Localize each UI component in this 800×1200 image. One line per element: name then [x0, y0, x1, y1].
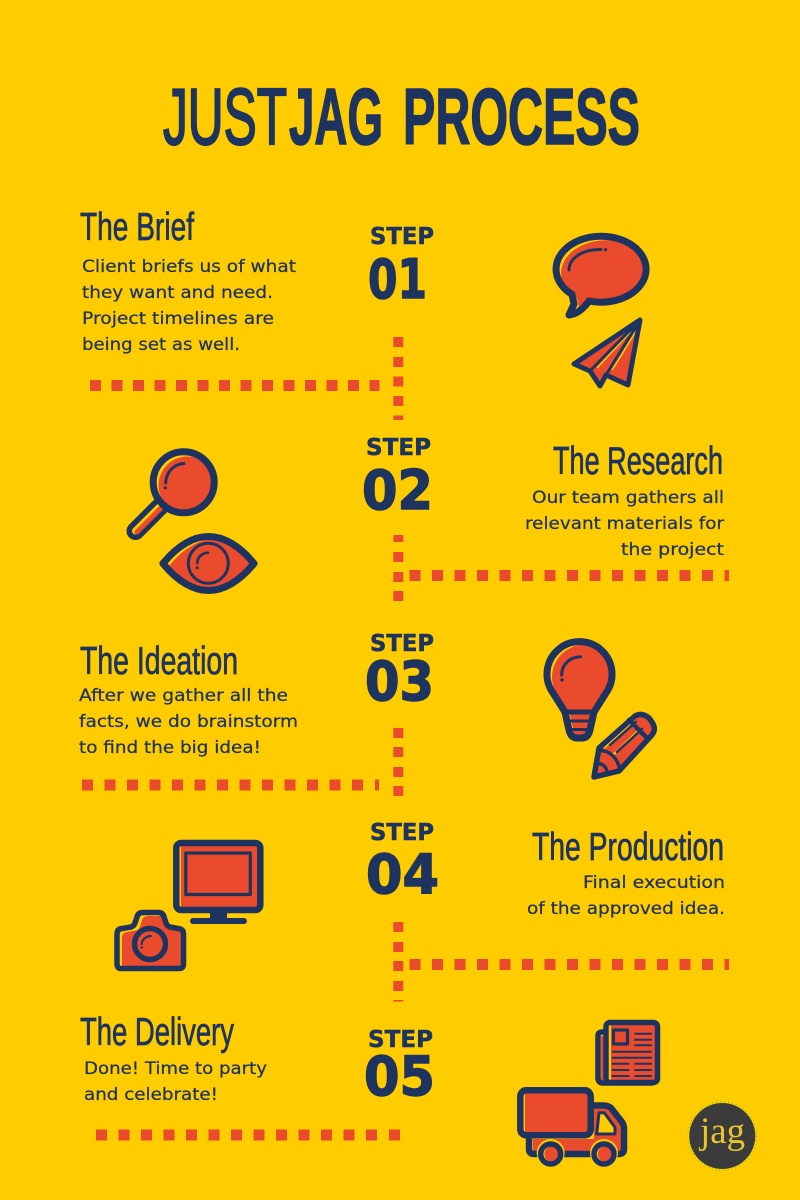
text block: the research: Our team gathers all [532, 488, 724, 508]
step badge 03: STEP [370, 629, 434, 657]
step badge 04: STEP [370, 818, 434, 846]
heading: the delivery: The Delivery [80, 1011, 235, 1054]
text block: the research: relevant materials for [525, 514, 725, 534]
icon: eye [163, 536, 260, 593]
connector dashes 4 [393, 922, 729, 1002]
step badge 01 [368, 222, 434, 311]
icon: monitor [176, 843, 260, 924]
panel: step 5 the delivery [80, 1011, 658, 1167]
text block: the production [527, 873, 725, 919]
text block: the production: of the approved idea. [527, 899, 725, 919]
icon: camera [117, 912, 188, 972]
text block: the delivery: Done! Time to party [84, 1059, 267, 1079]
logo: jag badge: jag [698, 1111, 745, 1152]
text block: the ideation: After we gather all the [79, 686, 288, 706]
title: PROCESS [403, 72, 640, 161]
text block: the brief: Client briefs us of what [82, 257, 296, 277]
connector dashes 1 [90, 337, 403, 420]
icon: delivery truck [520, 1090, 628, 1167]
icon: magnifying glass [136, 451, 216, 532]
step badge 03: 03 [365, 650, 434, 713]
step badge 04: 04 [366, 843, 439, 906]
text block: the brief: they want and need. [82, 283, 273, 303]
panel: step 3 the ideation [79, 629, 654, 796]
step badge 01: STEP [370, 222, 434, 250]
title [163, 72, 640, 161]
step badge 05: STEP [368, 1025, 433, 1053]
text block: the ideation: to find the big idea! [79, 738, 261, 758]
icon: newspaper [598, 1022, 658, 1083]
text block: the production: Final execution [583, 873, 725, 893]
step badge 02: STEP [366, 433, 431, 461]
text block: the brief: being set as well. [82, 335, 240, 355]
logo: jag badge [688, 1102, 757, 1170]
text block: the brief: Project timelines are [82, 309, 274, 329]
icon: speech bubble [556, 236, 651, 319]
title: JUST [163, 72, 287, 161]
text block: the research: the project [621, 540, 724, 560]
heading: the ideation: The Ideation [80, 640, 238, 683]
text block: the delivery: and celebrate! [84, 1085, 218, 1105]
title: JAG [289, 72, 383, 161]
panel: step 1 the brief [80, 206, 651, 420]
text block: the ideation: facts, we do brainstorm [79, 712, 298, 732]
heading: the brief: The Brief [80, 206, 194, 249]
step badge 01: 01 [368, 248, 427, 311]
text block: the research [525, 488, 725, 560]
panel: step 2 the research [136, 433, 729, 601]
heading: the production: The Production [532, 826, 724, 869]
step badge 02: 02 [362, 459, 433, 522]
connector dashes 3 [82, 728, 403, 796]
heading: the research: The Research [553, 440, 723, 483]
step badge 02 [362, 433, 433, 522]
panel: step 4 the production [117, 818, 729, 1002]
connector dashes 5 [96, 1130, 400, 1140]
icon: paper plane [574, 320, 640, 386]
connector dashes 2 [393, 535, 729, 601]
icon: pencil [594, 714, 654, 777]
text block: the brief [82, 257, 296, 355]
step badge 05: 05 [364, 1045, 435, 1108]
text block: the delivery [84, 1059, 267, 1105]
text block: the ideation [79, 686, 298, 758]
icon: light bulb [547, 642, 617, 741]
